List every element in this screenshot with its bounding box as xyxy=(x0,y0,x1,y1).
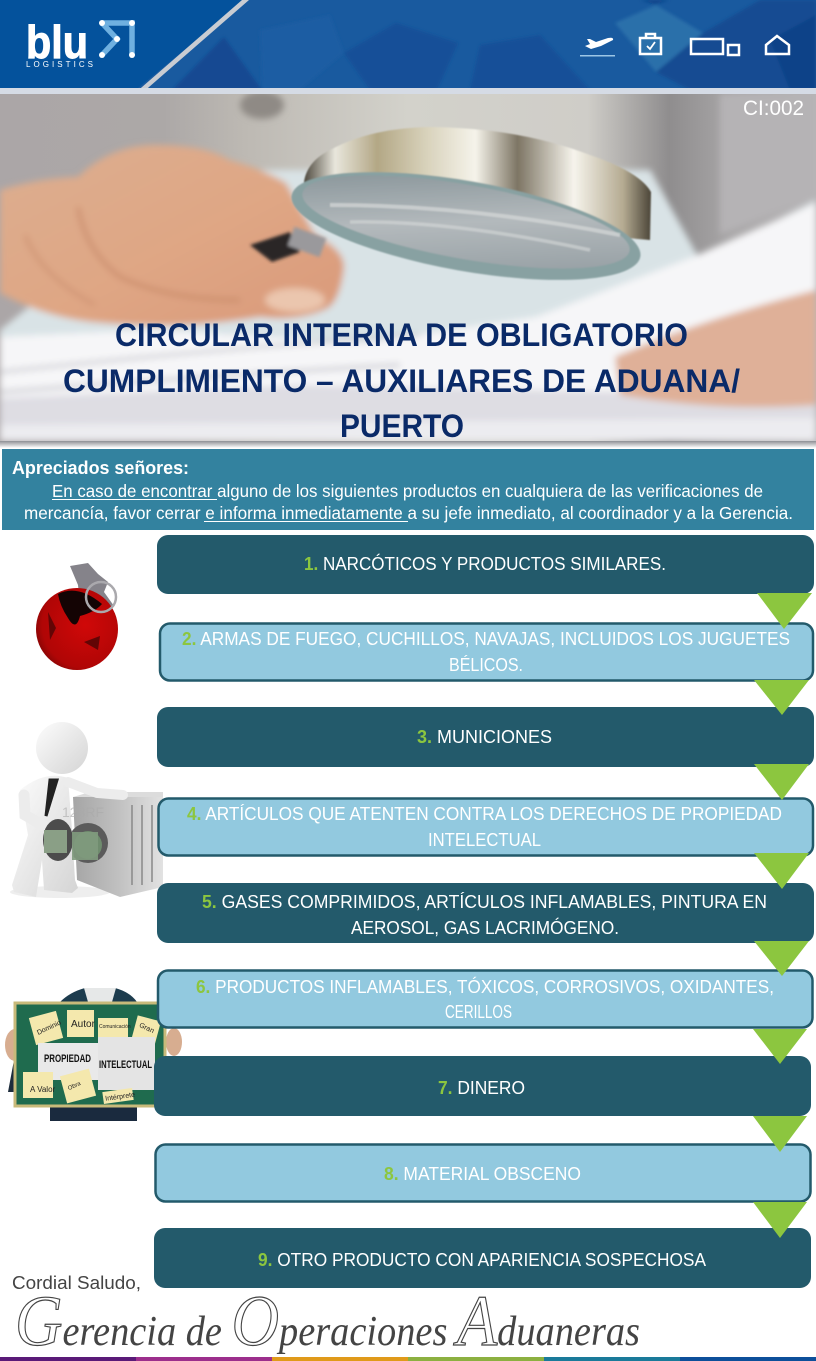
arrow 3 xyxy=(754,764,809,800)
label: CI:002: CI:002 xyxy=(743,97,804,120)
image: man holding intellectual property board: Comunicación xyxy=(99,1024,131,1030)
image: man holding intellectual property board: A Valor xyxy=(30,1085,56,1094)
arrow 5 xyxy=(754,941,809,976)
item 5 xyxy=(157,883,814,943)
image: man holding intellectual property board: Dominio xyxy=(36,1020,62,1037)
item 2: BÉLICOS. xyxy=(449,654,523,675)
logo: blu logistics xyxy=(26,16,135,69)
item 9 xyxy=(154,1228,811,1288)
closing text: Cordial Saludo, xyxy=(12,1273,141,1293)
image: man holding intellectual property board xyxy=(5,988,182,1121)
image: man holding intellectual property board: INTELECTUAL xyxy=(99,1059,152,1071)
arrow 7 xyxy=(753,1116,807,1152)
bottom color strip xyxy=(0,1357,816,1361)
item 5: 5. GASES COMPRIMIDOS, ARTÍCULOS INFLAMABLES, PINTURA EN xyxy=(202,891,767,912)
logo panel xyxy=(0,0,245,88)
icon: checked suitcase xyxy=(640,34,661,54)
title: CIRCULAR INTERNA DE OBLIGATORIO xyxy=(115,317,688,353)
icon: warehouse xyxy=(766,36,789,54)
item 6: 6. PRODUCTOS INFLAMABLES, TÓXICOS, CORROSIVOS, OXIDANTES, xyxy=(196,976,774,997)
item 7: 7. DINERO xyxy=(438,1077,525,1098)
panel: greeting and instructions xyxy=(2,449,814,530)
item 8 xyxy=(156,1144,810,1202)
icon: airplane departing xyxy=(580,38,615,56)
logo: blu logistics: blu xyxy=(26,16,88,68)
image: man holding intellectual property board: Autor xyxy=(71,1019,96,1030)
title: CUMPLIMIENTO – AUXILIARES DE ADUANA/ xyxy=(63,363,740,399)
item 6 xyxy=(158,970,812,1028)
photo bottom shadow xyxy=(0,441,816,448)
hand xyxy=(0,145,344,325)
image: 3D man laundering money xyxy=(10,722,163,898)
item 8: 8. MATERIAL OBSCENO xyxy=(384,1163,581,1184)
signature: Gerencia de Operaciones Aduaneras xyxy=(15,1281,640,1361)
item 3: 3. MUNICIONES xyxy=(417,726,552,747)
header bottom band xyxy=(0,88,816,94)
arrow 4 xyxy=(754,853,809,889)
image: man holding intellectual property board: Intérprete xyxy=(105,1092,136,1103)
arrow 2 xyxy=(754,680,809,715)
panel: greeting and instructions: mercancía, favor cerrar e informa inmediatamente a su jefe inmediato, al coordinador y a la Gerencia. xyxy=(24,503,793,523)
item 5: AEROSOL, GAS LACRIMÓGENO. xyxy=(351,917,619,938)
title xyxy=(63,317,740,444)
handle xyxy=(250,227,326,262)
item 2 xyxy=(160,624,813,680)
item 7 xyxy=(154,1056,811,1116)
image: grenade globe xyxy=(36,563,118,670)
panel: greeting and instructions: Apreciados señores: xyxy=(12,457,189,478)
item 3 xyxy=(157,707,814,767)
washing machine xyxy=(68,792,163,897)
title: PUERTO xyxy=(340,408,464,444)
diagonal divider xyxy=(134,0,249,94)
photo: hand with magnifying glass xyxy=(0,91,816,441)
item 2: 2. ARMAS DE FUEGO, CUCHILLOS, NAVAJAS, INCLUIDOS LOS JUGUETES xyxy=(182,628,790,649)
logo: blu logistics: LOGISTICS xyxy=(26,60,93,69)
item 4: INTELECTUAL xyxy=(428,829,541,850)
papers xyxy=(0,203,816,400)
image: 3D man laundering money: 123RF xyxy=(62,804,104,820)
header banner xyxy=(0,0,816,94)
image: man holding intellectual property board: Obra xyxy=(67,1081,82,1092)
lens xyxy=(290,127,652,281)
item 1 xyxy=(157,535,814,594)
item 1: 1. NARCÓTICOS Y PRODUCTOS SIMILARES. xyxy=(304,553,666,574)
image: man holding intellectual property board: Gran xyxy=(138,1022,155,1035)
man xyxy=(12,722,123,897)
icon: large and small container xyxy=(691,39,739,55)
item 6: CERILLOS xyxy=(445,1001,512,1022)
item 4 xyxy=(158,798,813,856)
item 4: 4. ARTÍCULOS QUE ATENTEN CONTRA LOS DERECHOS DE PROPIEDAD xyxy=(187,803,782,824)
image: man holding intellectual property board: PROPIEDAD xyxy=(44,1053,91,1065)
item 9: 9. OTRO PRODUCTO CON APARIENCIA SOSPECHOSA xyxy=(258,1249,707,1270)
arrow 1 xyxy=(757,593,812,629)
arrow 6 xyxy=(753,1029,807,1064)
panel: greeting and instructions: En caso de encontrar alguno de los siguientes productos en cualquiera de las verificaciones de xyxy=(52,481,763,501)
arrow 8 xyxy=(753,1202,807,1238)
right hand fingers xyxy=(615,290,816,407)
